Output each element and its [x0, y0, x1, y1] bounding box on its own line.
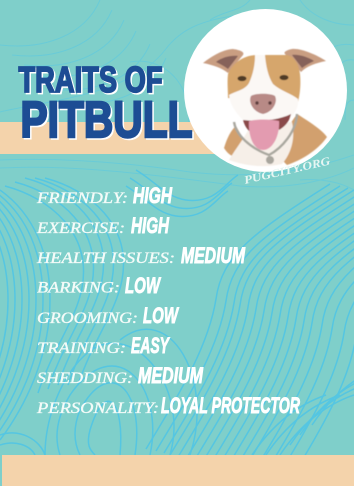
dog photo circle [184, 9, 347, 172]
collar [234, 114, 297, 155]
trait: shedding [37, 363, 203, 388]
trait: exercise: HIGH [131, 213, 170, 238]
eyes [238, 76, 246, 81]
trait: friendly: HIGH [133, 183, 173, 208]
title [18, 59, 194, 150]
bottom peach band [2, 455, 354, 486]
heading line: TRAITS OF: TRAITS OF [18, 59, 162, 100]
trait: friendly [36, 183, 173, 208]
trait: grooming: GROOMING: [37, 310, 138, 327]
watermark: PUGCITY.ORG [243, 155, 332, 187]
peach band behind title [0, 122, 222, 154]
trait: exercise [36, 213, 170, 238]
trait: personality: PERSONALITY: [36, 400, 159, 417]
mouth and tongue [243, 114, 291, 131]
trait: exercise: EXERCISE: [36, 220, 125, 237]
trait: grooming [37, 303, 180, 328]
heading line: TRAITS OF: TRAITS OF [20, 60, 164, 102]
trait: friendly: FRIENDLY: [36, 190, 128, 207]
trait: training: EASY [131, 333, 170, 358]
trait: barking: BARKING: [37, 280, 120, 296]
trait list [36, 183, 300, 418]
icon: dog [203, 49, 327, 166]
trait: training: TRAINING: [37, 340, 126, 357]
heading line: PITBULL: PITBULL [20, 91, 192, 148]
trait: barking: LOW [125, 273, 162, 298]
trait: health issues [36, 243, 245, 268]
nose [250, 94, 276, 114]
trait: barking [37, 273, 162, 298]
trait: personality [36, 393, 300, 418]
trait: health issues: HEALTH ISSUES: [36, 250, 175, 267]
trait: grooming: LOW [143, 303, 180, 328]
trait: shedding: SHEDDING: [37, 370, 133, 387]
heading line: PITBULL: PITBULL [22, 92, 194, 150]
trait: shedding: MEDIUM [138, 363, 203, 388]
trait: training [37, 333, 170, 358]
trait: health issues: MEDIUM [181, 243, 245, 268]
